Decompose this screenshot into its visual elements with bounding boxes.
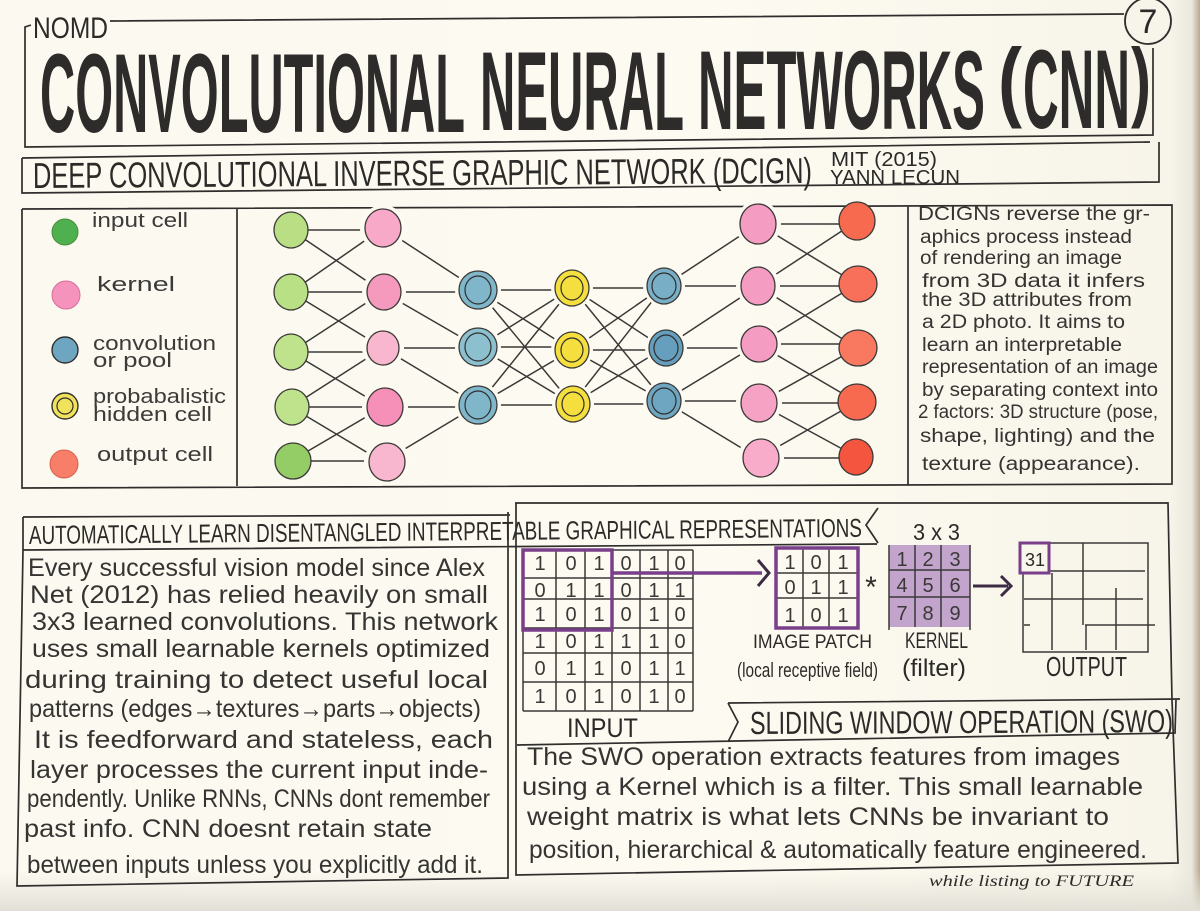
image patch: 1: [784, 552, 796, 574]
legend: convolution or pool: convolution: [93, 333, 216, 355]
image patch: [776, 548, 858, 628]
probabilistic hidden layer: [555, 270, 590, 422]
text block: CNN explanation: between inputs unless you explicitly add it.: [27, 851, 483, 879]
input grid: 1: [593, 580, 605, 602]
kernel matrix: [889, 545, 970, 630]
kernel matrix: 7: [896, 603, 908, 625]
label: output: OUTPUT: [1046, 651, 1127, 682]
text block: CNN explanation: uses small learnable kernels optimized: [32, 635, 490, 663]
text block: DCIGN description: 2 factors: 3D structure (pose,: [918, 402, 1158, 423]
kernel matrix: 5: [922, 575, 934, 597]
node halos: [360, 201, 784, 485]
text block: DCIGN description: of rendering an image: [920, 248, 1122, 269]
text block: DCIGN description: DCIGNs reverse the gr-: [918, 204, 1150, 225]
input grid: 1: [648, 686, 660, 708]
kernel matrix: 6: [949, 575, 961, 597]
label: kernel filter: [902, 628, 968, 682]
input grid: 0: [620, 604, 632, 626]
input grid: 1: [648, 631, 660, 653]
input grid: 1: [593, 686, 605, 708]
image patch: 1: [837, 552, 849, 574]
network connections: [291, 221, 857, 462]
panel: automatically learn text: [17, 508, 878, 886]
image patch: 0: [810, 552, 822, 574]
image patch: 1: [810, 577, 822, 599]
credit: MIT and Yann LeCun: [830, 149, 960, 189]
output grid: [1020, 543, 1155, 652]
legend: output cell: output cell: [97, 444, 213, 466]
panel: DCIGN network: [22, 201, 1172, 488]
deconvolution kernel layer: [740, 204, 779, 477]
kernel layer: [365, 209, 405, 481]
input grid: 0: [620, 658, 632, 680]
input grid: 0: [534, 658, 546, 680]
legend: convolution or pool: or pool: [93, 350, 172, 372]
legend: [50, 210, 226, 478]
output layer: [838, 202, 877, 475]
input grid: 1: [593, 553, 605, 575]
input grid: 0: [620, 580, 632, 602]
text block: SWO description: The SWO operation extracts features from images: [527, 743, 1120, 771]
title: ): [1131, 30, 1151, 129]
input grid: 0: [534, 580, 546, 602]
title: CONVOLUTIONAL: [40, 31, 465, 156]
text block: DCIGN description: a 2D photo. It aims to: [922, 312, 1125, 333]
label: 3x3: 3 x 3: [913, 519, 960, 545]
legend: kernel: [52, 274, 175, 309]
text block: DCIGN description: texture (appearance).: [922, 454, 1140, 475]
text block: DCIGN description: shape, lighting) and the: [920, 426, 1155, 447]
input grid: 1: [648, 658, 660, 680]
input grid: 0: [674, 553, 686, 575]
kernel matrix: 4: [896, 575, 908, 597]
text block: CNN explanation: pendently. Unlike RNNs, CNNs dont remember: [27, 785, 490, 813]
input grid: [523, 550, 693, 711]
text block: DCIGN description: by separating context into: [922, 380, 1158, 401]
panel: subtitle bar: [22, 142, 1159, 196]
page number badge: [1125, 0, 1171, 44]
text block: DCIGN description: the 3D attributes from: [922, 290, 1132, 311]
text block: CNN explanation: Every successful vision model since Alex: [28, 554, 486, 582]
page number badge: 7: [1139, 3, 1157, 41]
panel: title frame: [25, 0, 1171, 156]
text block: CNN explanation: Net (2012) has relied heavily on small: [30, 581, 488, 609]
image patch: 0: [784, 577, 796, 599]
output grid: 31: [1025, 550, 1045, 570]
legend: probabalistic hidden cell: [52, 386, 226, 426]
subtitle: DEEP CONVOLUTIONAL INVERSE GRAPHIC NETWORK (DCIGN): [33, 150, 812, 196]
legend: input cell: [52, 210, 188, 245]
label: kernel filter: (filter): [902, 655, 966, 682]
text block: CNN explanation: 3x3 learned convolutions. This network: [32, 608, 499, 636]
input layer: [274, 212, 311, 479]
text block: SWO description: position, hierarchical & automatically feature engineered.: [529, 836, 1147, 864]
legend: probabalistic hidden cell: hidden cell: [93, 404, 212, 426]
legend: output cell: [50, 444, 213, 478]
text block: DCIGN description: representation of an image: [922, 357, 1158, 378]
text block: CNN explanation: layer processes the current input inde-: [30, 756, 488, 784]
convolution layer: [459, 271, 497, 424]
input grid: 1: [620, 631, 632, 653]
text block: CNN explanation: It is feedforward and stateless, each: [34, 726, 493, 754]
pooling layer: [647, 268, 683, 419]
legend: input cell: input cell: [92, 210, 188, 232]
signature note: while listing to FUTURE: [929, 873, 1134, 890]
legend: convolution or pool: [52, 333, 216, 372]
credit: MIT and Yann LeCun: YANN LECUN: [830, 167, 960, 189]
input grid: 1: [648, 553, 660, 575]
input grid: 1: [648, 580, 660, 602]
input grid: 1: [565, 658, 577, 680]
title: NEURAL: [480, 29, 684, 154]
kernel matrix: 2: [922, 549, 934, 571]
input grid: 1: [674, 658, 686, 680]
input grid: 0: [565, 604, 577, 626]
input grid: 1: [534, 631, 546, 653]
header banner: AUTOMATICALLY LEARN DISENTANGLED INTERPRETABLE GRAPHICAL REPRESENTATIONS: [29, 513, 862, 550]
image patch: 1: [837, 605, 849, 627]
kernel matrix: 8: [922, 603, 934, 625]
multiply sign: *: [865, 571, 877, 604]
input grid: 0: [674, 631, 686, 653]
text block: DCIGN description: [918, 204, 1158, 475]
image patch: 0: [810, 605, 822, 627]
image patch: 1: [837, 577, 849, 599]
kernel matrix: 9: [949, 603, 961, 625]
heading: sliding window operation: [517, 699, 1180, 745]
arrow: patch selection: [612, 560, 769, 586]
input grid: 1: [593, 658, 605, 680]
label: input: INPUT: [567, 713, 638, 743]
image patch: 1: [784, 605, 796, 627]
input grid: 0: [565, 631, 577, 653]
label: image patch: [737, 632, 878, 682]
kernel matrix: 3: [949, 549, 961, 571]
input grid: 0: [620, 686, 632, 708]
input grid: 1: [534, 686, 546, 708]
input grid: 0: [565, 553, 577, 575]
label: image patch: IMAGE PATCH: [753, 632, 872, 653]
legend: probabalistic hidden cell: probabalistic: [93, 386, 226, 408]
label: kernel filter: KERNEL: [905, 628, 968, 653]
text block: CNN explanation: past info. CNN doesnt retain state: [24, 815, 432, 843]
input grid: 0: [620, 553, 632, 575]
input grid: 0: [565, 686, 577, 708]
input grid: 1: [534, 553, 546, 575]
input grid: 1: [648, 604, 660, 626]
label: image patch: (local receptive field): [737, 660, 878, 682]
arrow: kernel to output: [973, 576, 1011, 596]
text block: DCIGN description: aphics process instead: [920, 227, 1132, 248]
panel: sliding window diagram: [515, 503, 1180, 890]
text block: SWO description: weight matrix is what lets CNNs be invariant to: [526, 803, 1109, 831]
label: NOMD: NOMD: [33, 12, 108, 45]
text block: CNN explanation: during training to detect useful local: [25, 666, 488, 694]
legend: kernel: kernel: [97, 274, 175, 296]
text block: SWO description: [522, 743, 1147, 864]
kernel matrix: 1: [896, 549, 908, 571]
text block: DCIGN description: learn an interpretable: [922, 335, 1122, 356]
text block: CNN explanation: patterns (edges→textures→parts→objects): [29, 695, 481, 723]
input grid: 0: [674, 686, 686, 708]
input grid: 1: [593, 604, 605, 626]
input grid: 1: [674, 580, 686, 602]
title: (: [998, 30, 1023, 129]
input grid: 1: [565, 580, 577, 602]
text block: SWO description: using a Kernel which is a filter. This small learnable: [522, 773, 1143, 801]
text block: DCIGN description: from 3D data it infers: [922, 271, 1145, 292]
credit: MIT and Yann LeCun: MIT (2015): [831, 149, 937, 171]
input grid: 1: [534, 604, 546, 626]
text block: CNN explanation: [24, 554, 499, 879]
input grid: 0: [674, 604, 686, 626]
input grid: 1: [593, 631, 605, 653]
